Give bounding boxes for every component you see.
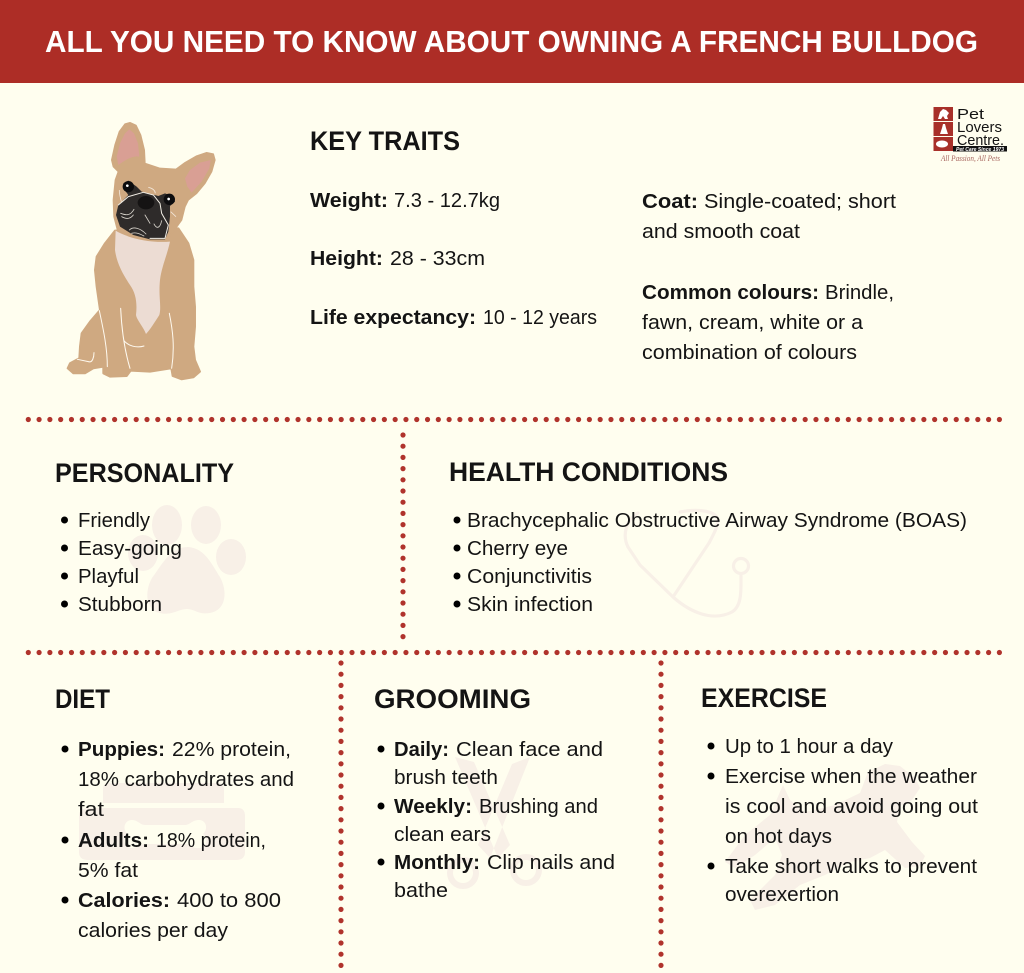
personality list: Easy-going [78,537,182,560]
exercise list: Exercise when the weather [725,765,977,788]
title banner [0,0,1024,83]
diet list: 5% fat [78,859,138,882]
health conditions list: Skin infection [467,593,593,616]
diet list: Adults: [78,830,149,852]
diet list: fat [78,798,104,821]
panel: grooming [374,684,615,902]
key traits: right column: Common colours: [642,282,819,304]
key traits heading: KEY TRAITS [310,126,460,156]
panel: diet [55,684,294,942]
grooming heading: GROOMING [374,684,531,714]
diet list: 400 to 800 [177,889,281,912]
logo: Pet Lovers Centre: Lovers [957,120,1002,136]
grooming list: clean ears [394,823,491,846]
key traits: right column: Brindle, [825,281,894,304]
key traits: left column: Weight: [310,190,388,212]
diet list: calories per day [78,919,229,942]
icon: food bowl watermark [79,783,245,860]
diet list [62,738,294,942]
diet list: Puppies: [78,739,165,761]
health conditions list: Conjunctivitis [467,565,592,588]
panel: health conditions [449,457,967,616]
key traits: right column: and smooth coat [642,220,800,243]
logo: Pet Lovers Centre: Centre. [957,133,1004,149]
icon: paw watermark [128,505,246,614]
logo: Pet Lovers Centre: Pet Care Since 1973 [956,147,1004,153]
exercise list: overexertion [725,883,839,906]
panel: personality [55,458,246,616]
diet list: 18% carbohydrates and [78,768,294,791]
health conditions list [454,509,967,616]
panel: exercise [701,683,978,910]
logo: Pet Lovers Centre: All Passion, All Pets [940,154,1000,163]
grooming list: Clip nails and [487,851,615,874]
exercise list: is cool and avoid going out [725,795,978,818]
illustration: French bulldog [68,123,215,379]
exercise heading: EXERCISE [701,683,827,713]
title banner: ALL YOU NEED TO KNOW ABOUT OWNING A FRENCH BULLDOG [45,24,978,59]
health conditions list: Cherry eye [467,537,568,560]
personality list [61,509,182,616]
key traits: left column: 28 - 33cm [390,247,485,270]
key traits: left column: 10 - 12 years [483,306,597,329]
grooming list: brush teeth [394,766,498,789]
exercise list: on hot days [725,825,832,848]
diet list: 22% protein, [172,738,291,761]
personality list: Stubborn [78,593,162,616]
key traits: right column: combination of colours [642,341,857,364]
health conditions list: Brachycephalic Obstructive Airway Syndrome (BOAS) [467,509,967,532]
personality list: Playful [78,565,139,588]
personality heading: PERSONALITY [55,458,234,488]
diet heading: DIET [55,684,110,714]
exercise list [708,735,978,906]
diet list: 18% protein, [156,829,266,852]
key traits: left column: 7.3 - 12.7kg [394,189,500,212]
icon: running dog watermark [725,764,925,910]
grooming list: bathe [394,879,448,902]
logo: Pet Lovers Centre [933,107,1007,163]
exercise list: Up to 1 hour a day [725,735,894,758]
personality list: Friendly [78,509,151,532]
grooming list [378,738,615,902]
icon: stethoscope watermark [625,510,748,616]
key traits: left column: Height: [310,248,383,270]
key traits: right column: Coat: [642,191,698,213]
key traits: right column [642,190,896,364]
grooming list: Weekly: [394,796,472,818]
logo: Pet Lovers Centre: Pet [957,107,984,123]
health conditions heading: HEALTH CONDITIONS [449,457,728,487]
grooming list: Clean face and [456,738,603,761]
key traits: left column: Life expectancy: [310,307,476,329]
grooming list: Monthly: [394,852,480,874]
icon: scissors watermark [450,757,539,886]
key traits: right column: Single-coated; short [704,190,896,213]
key traits: left column [310,189,597,329]
key traits: right column: fawn, cream, white or a [642,311,864,334]
diet list: Calories: [78,890,170,912]
exercise list: Take short walks to prevent [725,855,977,878]
grooming list: Daily: [394,739,449,761]
grooming list: Brushing and [479,795,598,818]
